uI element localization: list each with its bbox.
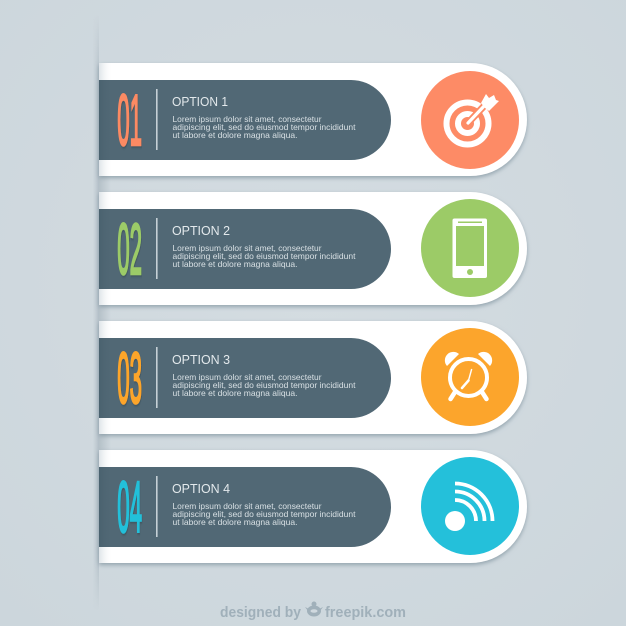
heading option 4: OPTION 4 (172, 482, 230, 496)
text block 1: ut labore et dolore magna aliqua. (172, 130, 298, 140)
white band 2 (99, 192, 527, 305)
number 01: 01 (117, 82, 142, 161)
heading option 1: OPTION 1 (172, 95, 228, 109)
heading option 2: OPTION 2 (172, 224, 230, 238)
icon circle 3 (421, 328, 519, 426)
text block 1: Lorem ipsum dolor sit amet, consectetur (172, 114, 322, 124)
text block 2: adipiscing elit, sed do eiusmod tempor incididunt (172, 251, 356, 261)
number 02: 02 (117, 211, 142, 290)
white band 3 (99, 321, 527, 434)
icon: alarm clock (445, 352, 492, 399)
text block 3: ut labore et dolore magna aliqua. (172, 388, 298, 398)
icon: smartphone (452, 218, 487, 278)
text block 2 (172, 243, 356, 269)
panel: option 4 (99, 450, 527, 563)
panel: option 3 (99, 321, 527, 434)
number 03: 03 (117, 340, 142, 419)
text block 3 (172, 372, 356, 398)
text block 4 (172, 501, 356, 527)
icon circle 1 (421, 71, 519, 169)
footer credit (220, 602, 406, 621)
dark bar 3 (99, 338, 391, 418)
icon circle 2 (421, 199, 519, 297)
text block 3: adipiscing elit, sed do eiusmod tempor incididunt (172, 380, 356, 390)
number 04: 04 (117, 469, 142, 548)
panel: option 2 (99, 192, 527, 305)
footer credit: designed by (220, 605, 301, 621)
text block 2: ut labore et dolore magna aliqua. (172, 259, 298, 269)
text block 4: ut labore et dolore magna aliqua. (172, 517, 298, 527)
icon: target (446, 94, 499, 144)
icon: freepik logo (305, 602, 323, 616)
footer credit: freepik.com (325, 605, 406, 621)
panel: option 1 (99, 63, 527, 176)
text block 2: Lorem ipsum dolor sit amet, consectetur (172, 243, 322, 253)
icon: wifi signal (445, 484, 492, 531)
fold shadow line (95, 36, 99, 592)
text block 4: adipiscing elit, sed do eiusmod tempor incididunt (172, 509, 356, 519)
dark bar 2 (99, 209, 391, 289)
text block 3: Lorem ipsum dolor sit amet, consectetur (172, 372, 322, 382)
text block 1: adipiscing elit, sed do eiusmod tempor incididunt (172, 122, 356, 132)
text block 4: Lorem ipsum dolor sit amet, consectetur (172, 501, 322, 511)
dark bar 1 (99, 80, 391, 160)
icon circle 4 (421, 457, 519, 555)
white band 1 (99, 63, 527, 176)
heading option 3: OPTION 3 (172, 353, 230, 367)
text block 1 (172, 114, 356, 140)
white band 4 (99, 450, 527, 563)
dark bar 4 (99, 467, 391, 547)
